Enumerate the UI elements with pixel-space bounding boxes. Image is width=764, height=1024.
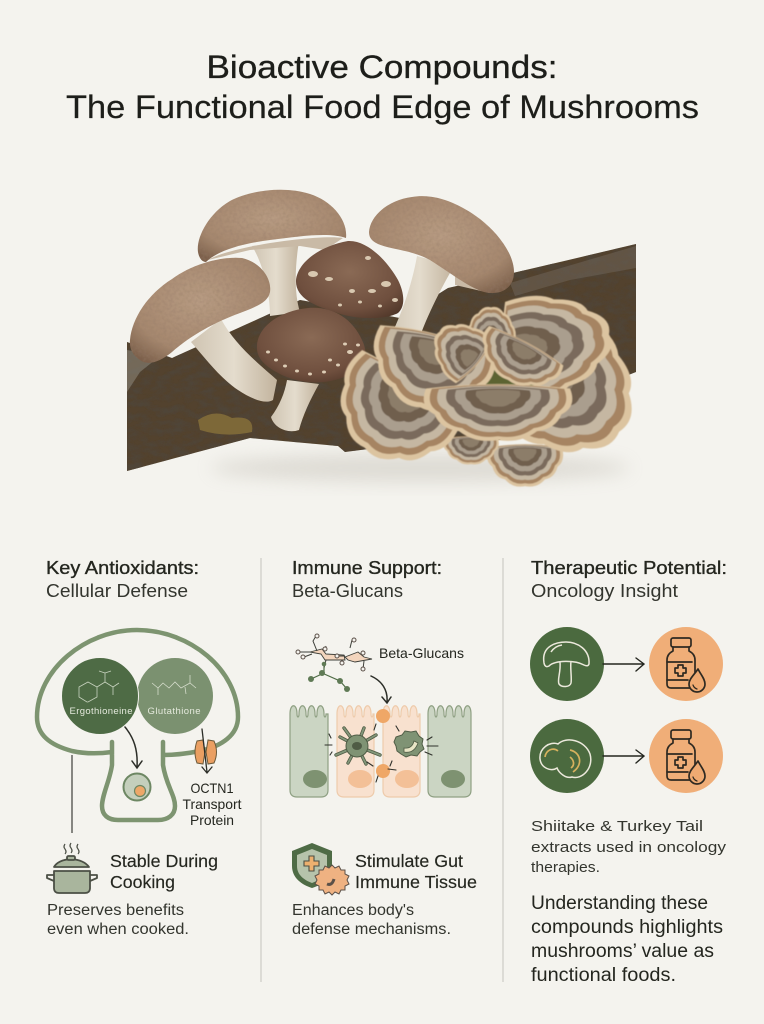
text: preserves benefits: Preserves benefits [47, 902, 184, 919]
title [66, 49, 699, 125]
heading: Beta-Glucans [292, 580, 403, 601]
cap: front dark shiitake [257, 308, 365, 382]
text: conclusion: functional foods. [531, 965, 676, 986]
connector line [71, 755, 73, 833]
mushroom cell diagram [37, 630, 242, 833]
heading [46, 557, 199, 601]
icon: medicine bottle [649, 719, 723, 793]
hero photo: mushrooms on a log [127, 190, 664, 488]
heading: Cellular Defense [46, 580, 188, 601]
title: The Functional Food Edge of Mushrooms [66, 89, 699, 125]
arrow [603, 750, 644, 763]
mushroom outline [37, 630, 238, 820]
stem: left shiitake [191, 319, 277, 402]
label: OCTN1: OCTN1 [190, 780, 234, 796]
text: conclusion: mushrooms’ value as [531, 941, 714, 962]
panel: therapeutic potential [530, 557, 727, 986]
circle: ergothioneine: Ergothioneine [70, 706, 132, 717]
icon: shield with germ badge [292, 843, 349, 895]
text: extracts: Shiitake & Turkey Tail [531, 818, 703, 835]
heading: Therapeutic Potential: [531, 557, 727, 578]
macrophage [394, 731, 424, 757]
stem: back shiitake [252, 241, 300, 316]
underside: right shiitake [455, 268, 490, 293]
arrow: to tissue [371, 676, 391, 703]
text: enhances defense: defense mechanisms. [292, 921, 451, 938]
signal dots [325, 709, 438, 782]
text: enhances defense: Enhances body's [292, 902, 414, 919]
heading: Oncology Insight [531, 580, 678, 601]
heading: Immune Support: [292, 557, 442, 578]
icon: medicine bottle [649, 627, 723, 701]
callout: stimulate gut immune tissue: Immune Tissue [355, 872, 477, 892]
panel: key antioxidants [37, 557, 242, 938]
circle: ergothioneine [62, 658, 138, 734]
arrow [603, 658, 644, 671]
gut epithelium cells [290, 706, 471, 797]
beta-glucan molecule [296, 634, 372, 692]
heading: Key Antioxidants: [46, 557, 199, 578]
column divider [502, 558, 504, 982]
callout: stimulate gut immune tissue [355, 851, 477, 892]
stem: front shiitake [271, 380, 319, 431]
text: preserves benefits: even when cooked. [47, 921, 189, 938]
text: preserves benefits [47, 902, 189, 938]
cap: middle dark shiitake [296, 241, 403, 318]
stem: right shiitake [385, 256, 454, 347]
panel: immune support [290, 557, 477, 938]
arrow: to cell [125, 727, 142, 768]
moss [432, 338, 548, 398]
label: beta-glucans: Beta-Glucans [379, 645, 464, 661]
heading [292, 557, 442, 601]
callout: stable during cooking: Stable During [110, 851, 218, 871]
cap: left shiitake [130, 258, 270, 363]
dendritic cell [336, 728, 380, 764]
column divider [260, 558, 262, 982]
text: conclusion: compounds highlights [531, 917, 723, 938]
text: extracts: therapies. [531, 859, 600, 876]
label: OCTN1: Transport [182, 796, 242, 812]
icon: cooking pot [47, 843, 97, 893]
icon: shiitake circle [530, 627, 604, 701]
transport protein [195, 729, 216, 773]
circle: glutathione: Glutathione [148, 706, 200, 717]
cap: back shiitake [198, 190, 346, 262]
circle: glutathione [137, 658, 213, 734]
text: enhances defense [292, 902, 451, 938]
icon: turkey tail circle [530, 719, 604, 793]
underside: back shiitake [208, 237, 343, 260]
text: extracts: extracts used in oncology [531, 839, 727, 856]
title: Bioactive Compounds: [206, 49, 558, 85]
callout: stimulate gut immune tissue: Stimulate Gut [355, 851, 463, 871]
cell icon [124, 774, 150, 800]
label: OCTN1 [182, 780, 242, 828]
label: OCTN1: Protein [190, 812, 234, 828]
heading [531, 557, 727, 601]
text: extracts [531, 818, 727, 876]
turkey tail fungus [314, 283, 664, 488]
cap: right shiitake [369, 196, 514, 293]
callout: stable during cooking: Cooking [110, 872, 175, 892]
callout: stable during cooking [110, 851, 218, 892]
text: conclusion: Understanding these [531, 893, 708, 914]
text: conclusion [531, 893, 723, 986]
log [127, 244, 636, 471]
